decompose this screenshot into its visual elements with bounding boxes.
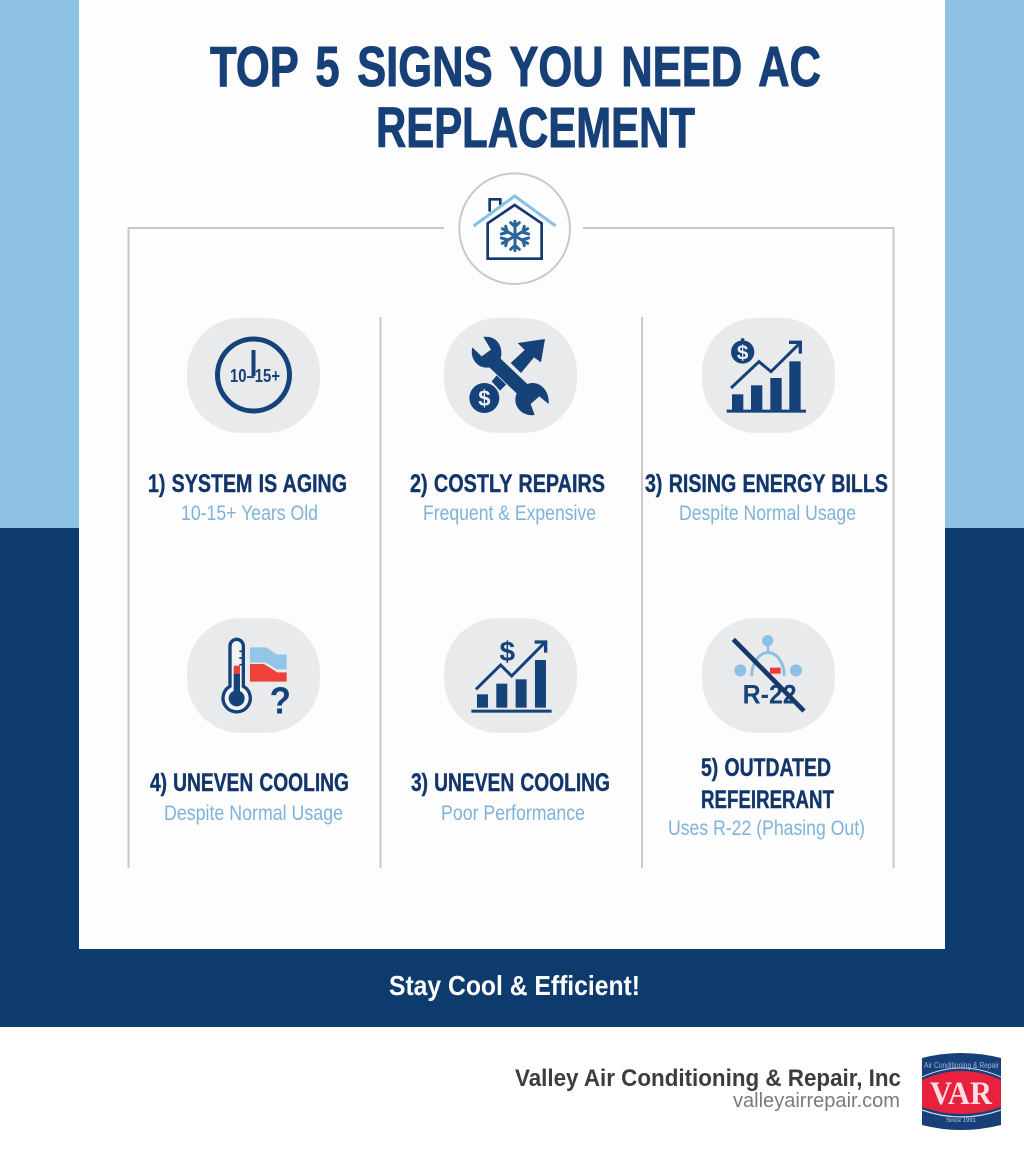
icon: rising bar chart with dollar coin: $ bbox=[737, 342, 749, 365]
subtext: sign 5: Uses R-22 (Phasing Out) bbox=[668, 817, 865, 840]
icon: clock 10-15+: 10–15+ bbox=[230, 366, 280, 386]
footer company name: Valley Air Conditioning & Repair, Inc bbox=[515, 1065, 901, 1092]
logo: VAR badge: Since 1991 bbox=[946, 1118, 977, 1124]
heading: sign 5 bbox=[701, 754, 834, 814]
subtext: sign 2: Frequent & Expensive bbox=[423, 502, 596, 525]
heading: sign 5: REFEIRERANT bbox=[701, 786, 834, 814]
heading: repeated sign 3: 3) UNEVEN COOLING bbox=[411, 769, 610, 797]
panel: sign 4 uneven cooling bbox=[150, 618, 349, 825]
subtext: sign 1: 10-15+ Years Old bbox=[181, 502, 318, 525]
icon: clock 10-15+ bbox=[187, 318, 320, 433]
logo: VAR badge bbox=[922, 1053, 1001, 1130]
panel: central white card bbox=[79, 0, 945, 949]
panel: sign 3 rising energy bills bbox=[645, 318, 888, 525]
icon: house with snowflake bbox=[459, 173, 570, 284]
title bbox=[210, 35, 821, 160]
panel: sign 5 outdated refrigerant bbox=[668, 618, 865, 840]
heading: sign 3: 3) RISING ENERGY BILLS bbox=[645, 470, 888, 498]
icon: wrench, arrow and dollar: $ bbox=[478, 386, 490, 411]
icon: thermometer with uneven bands bbox=[187, 618, 320, 733]
footer website: valleyairrepair.com bbox=[733, 1090, 900, 1112]
icon: crossed out R-22 gauge: R-22 bbox=[743, 679, 797, 709]
panel: sign 3 uneven cooling repeat bbox=[411, 618, 610, 825]
background: navy lower band bbox=[0, 528, 1024, 1027]
title: REPLACEMENT bbox=[376, 96, 695, 160]
subtext: sign 3: Despite Normal Usage bbox=[679, 502, 856, 525]
title: TOP 5 SIGNS YOU NEED AC bbox=[210, 35, 821, 99]
heading: sign 1: 1) SYSTEM IS AGING bbox=[148, 470, 347, 498]
subtext: repeated sign 3: Poor Performance bbox=[441, 802, 585, 825]
subtext: sign 4: Despite Normal Usage bbox=[164, 802, 343, 825]
tagline: Stay Cool & Efficient! bbox=[389, 970, 640, 1001]
background: white footer bbox=[0, 1027, 1024, 1154]
background: light blue upper band bbox=[0, 0, 1024, 528]
icon: crossed out R-22 gauge bbox=[702, 618, 835, 733]
icon: rising bar chart with dollar sign: $ bbox=[500, 636, 516, 667]
icon: thermometer with uneven bands: ? bbox=[270, 680, 291, 723]
logo: VAR badge: Air Conditioning & Repair bbox=[924, 1061, 999, 1070]
panel: sign 2 costly repairs bbox=[410, 318, 605, 525]
heading: sign 4: 4) UNEVEN COOLING bbox=[150, 769, 349, 797]
heading: sign 2: 2) COSTLY REPAIRS bbox=[410, 470, 605, 498]
logo: VAR badge: VAR bbox=[930, 1076, 993, 1112]
icon: rising bar chart with dollar coin bbox=[702, 318, 835, 433]
icon: wrench, arrow and dollar bbox=[444, 318, 577, 433]
icon: rising bar chart with dollar sign bbox=[444, 618, 577, 733]
panel: sign 1 system is aging bbox=[148, 318, 347, 525]
heading: sign 5: 5) OUTDATED bbox=[701, 754, 831, 782]
